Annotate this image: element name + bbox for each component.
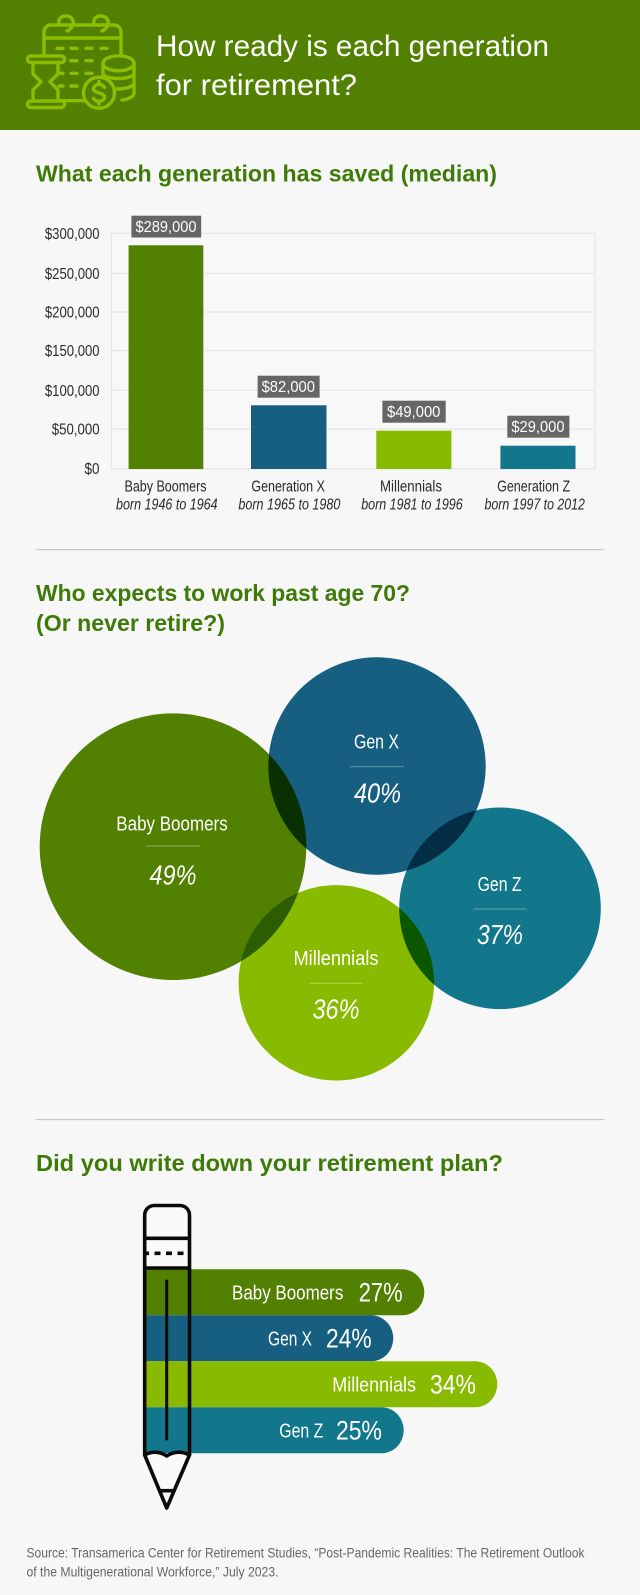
bar: Millennials 34%: 34% [430,1370,476,1400]
circle: Gen Z 37%: Gen Z [478,874,522,896]
bar: Baby Boomers 27%: 27% [359,1278,403,1308]
bar: Baby Boomers: $289,000 [136,219,197,236]
circle: Baby Boomers 49% [116,814,228,890]
overlapping circles chart [40,657,601,1080]
header banner [0,0,640,130]
icon: pencil outline [145,1206,190,1508]
circle: Gen X 40%: 40% [354,777,401,808]
icon: calendar, hourglass and coins [28,16,134,108]
category labels: Baby Boomers [124,478,207,496]
circle: Gen Z 37%: 37% [477,919,523,950]
circle shapes [40,657,601,1080]
category labels: Generation X [251,478,325,496]
category labels: Millennials [380,478,442,496]
circle: Baby Boomers 49%: Baby Boomers [116,814,228,836]
circle: Gen Z 37% [474,874,526,950]
category labels: born 1965 to 1980 [238,496,341,514]
bar: Baby Boomers 27%: Baby Boomers [232,1281,343,1304]
y axis labels: $250,000 [45,266,100,283]
bar: Gen X 24%: Gen X [268,1327,312,1350]
heading: who expects to work past age 70 [36,580,410,636]
category labels: born 1997 to 2012 [484,496,585,514]
title: for retirement? [156,69,357,102]
category labels: born 1946 to 1964 [116,496,218,514]
y axis labels [45,226,100,478]
y axis labels: $300,000 [45,226,100,243]
heading: who expects to work past age 70: Who expects to work past age 70? [36,580,410,606]
source note [26,1545,585,1580]
bar: Millennials [376,401,451,469]
title: How ready is each generation [156,30,549,63]
circle: Millennials 36%: Millennials [294,948,378,970]
category labels [116,478,585,514]
bar: Generation X: $82,000 [262,379,315,396]
heading: did you write down your retirement plan: Did you write down your retirement plan? [36,1150,503,1176]
bar: Generation Z [500,416,576,469]
bar: Gen Z 25%: 25% [336,1416,382,1446]
bar: Millennials 34% [146,1361,497,1407]
bar chart: median savings by generation [45,216,595,513]
bar: Gen X 24%: 24% [326,1324,372,1354]
bar: Gen Z 25%: Gen Z [279,1419,323,1442]
heading: what each generation has saved: What each generation has saved (median) [36,161,497,187]
y axis labels: $0 [84,461,100,478]
bar: Generation X [251,376,326,469]
circle: Millennials 36%: 36% [312,994,360,1025]
category labels: Generation Z [497,478,570,496]
y axis labels: $150,000 [45,343,100,360]
bar: Millennials 34%: Millennials [332,1373,416,1396]
circle: Millennials 36% [294,948,378,1025]
circle: Baby Boomers 49%: 49% [150,859,196,890]
y axis labels: $100,000 [45,383,100,400]
source note: Source: Transamerica Center for Retirement Studies, “Post-Pandemic Realities: The Retirement Outlook [26,1545,585,1560]
category labels: born 1981 to 1996 [361,496,463,514]
y axis labels: $200,000 [45,304,100,322]
bar: Baby Boomers [129,216,203,469]
heading: who expects to work past age 70: (Or never retire?) [36,610,225,636]
y axis labels: $50,000 [52,422,100,438]
circle: Gen X 40%: Gen X [354,731,399,753]
title [156,30,549,102]
circle: Gen X 40% [350,731,404,808]
bar: Gen Z 25% [146,1407,404,1453]
bar: Generation Z: $29,000 [511,419,565,436]
bar: Gen X 24% [146,1315,393,1361]
pencil bar chart [145,1206,497,1508]
bar: Millennials: $49,000 [387,404,440,421]
source note: of the Multigenerational Workforce,” July 2023. [26,1565,278,1580]
bar: Baby Boomers 27% [146,1269,424,1315]
